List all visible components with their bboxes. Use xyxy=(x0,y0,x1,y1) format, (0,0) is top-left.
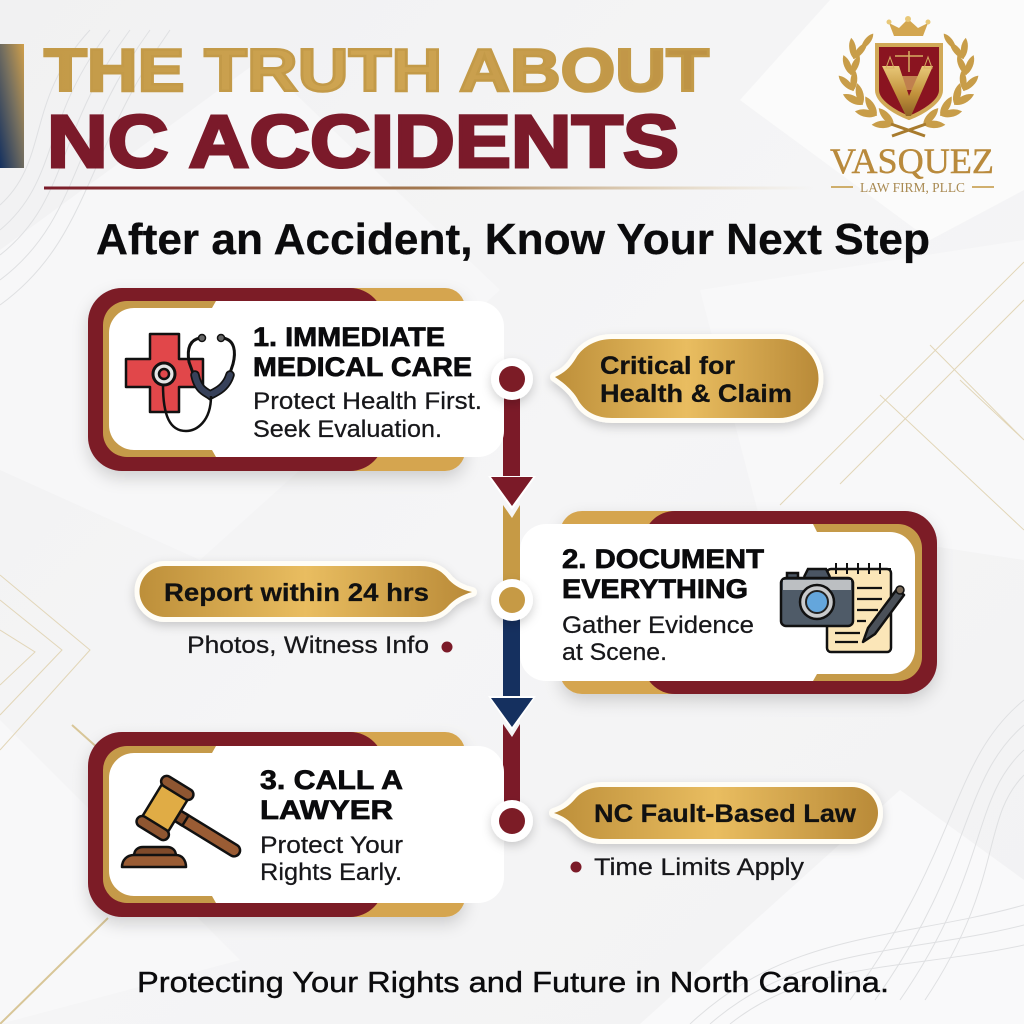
note: photos and witness info: Photos, Witness Info xyxy=(187,632,429,659)
timeline node 3 xyxy=(491,800,533,842)
logo wordmark: VASQUEZ xyxy=(830,141,994,181)
title accent bar xyxy=(0,44,24,168)
callout: report within 24 hrs: Report within 24 hrs xyxy=(164,579,429,607)
callout: NC fault-based law xyxy=(554,787,878,839)
callout: critical for health and claim: Critical for xyxy=(600,352,735,380)
callout: critical for health and claim: Health & Claim xyxy=(600,380,792,408)
subtitle: After an Accident, Know Your Next Step xyxy=(96,215,930,264)
panel: step 3 call a lawyer xyxy=(88,732,504,917)
icon: crown xyxy=(886,16,930,36)
step 3 heading xyxy=(260,765,403,825)
step 1 heading: 1. IMMEDIATE xyxy=(253,322,445,352)
callout: report within 24 hrs xyxy=(140,566,472,617)
title: NC ACCIDENTS xyxy=(47,100,679,183)
logo tagline: LAW FIRM, PLLC xyxy=(860,180,965,195)
title xyxy=(44,37,709,183)
title: THE TRUTH ABOUT xyxy=(44,37,709,104)
panel: step 2 document everything xyxy=(520,511,937,694)
step 2 description: at Scene. xyxy=(562,639,667,666)
logo: Vasquez Law Firm xyxy=(830,16,994,195)
timeline connector xyxy=(488,379,536,821)
step 2 heading xyxy=(562,544,765,604)
step 2 description xyxy=(562,612,754,666)
step 2 description: Gather Evidence xyxy=(562,612,754,639)
step 3 description: Protect Your xyxy=(260,832,403,859)
footer tagline: Protecting Your Rights and Future in North Carolina. xyxy=(137,967,889,999)
callout: NC fault-based law: NC Fault-Based Law xyxy=(594,800,857,828)
step 2 heading: EVERYTHING xyxy=(562,574,748,604)
timeline node 2 xyxy=(491,579,533,621)
panel: step 1 medical care xyxy=(88,288,504,471)
step 1 description xyxy=(253,388,482,443)
step 1 description: Seek Evaluation. xyxy=(253,416,442,443)
icon: camera notepad and pen xyxy=(781,563,904,652)
step 3 description xyxy=(260,832,403,886)
step 3 heading: LAWYER xyxy=(260,795,393,825)
icon: gavel xyxy=(122,774,254,878)
step 3 description: Rights Early. xyxy=(260,859,402,886)
title rule xyxy=(44,186,814,190)
step 1 heading xyxy=(253,322,472,382)
step 3 heading: 3. CALL A xyxy=(260,765,403,795)
timeline node 1 xyxy=(491,358,533,400)
step 2 heading: 2. DOCUMENT xyxy=(562,544,765,574)
icon: shield xyxy=(877,45,941,118)
icon: red cross and stethoscope xyxy=(126,334,234,431)
step 1 heading: MEDICAL CARE xyxy=(253,352,472,382)
callout: critical for health and claim xyxy=(555,339,818,418)
note: time limits apply: Time Limits Apply xyxy=(594,854,805,881)
step 1 description: Protect Health First. xyxy=(253,388,482,415)
icon: laurel wreath xyxy=(838,33,979,136)
